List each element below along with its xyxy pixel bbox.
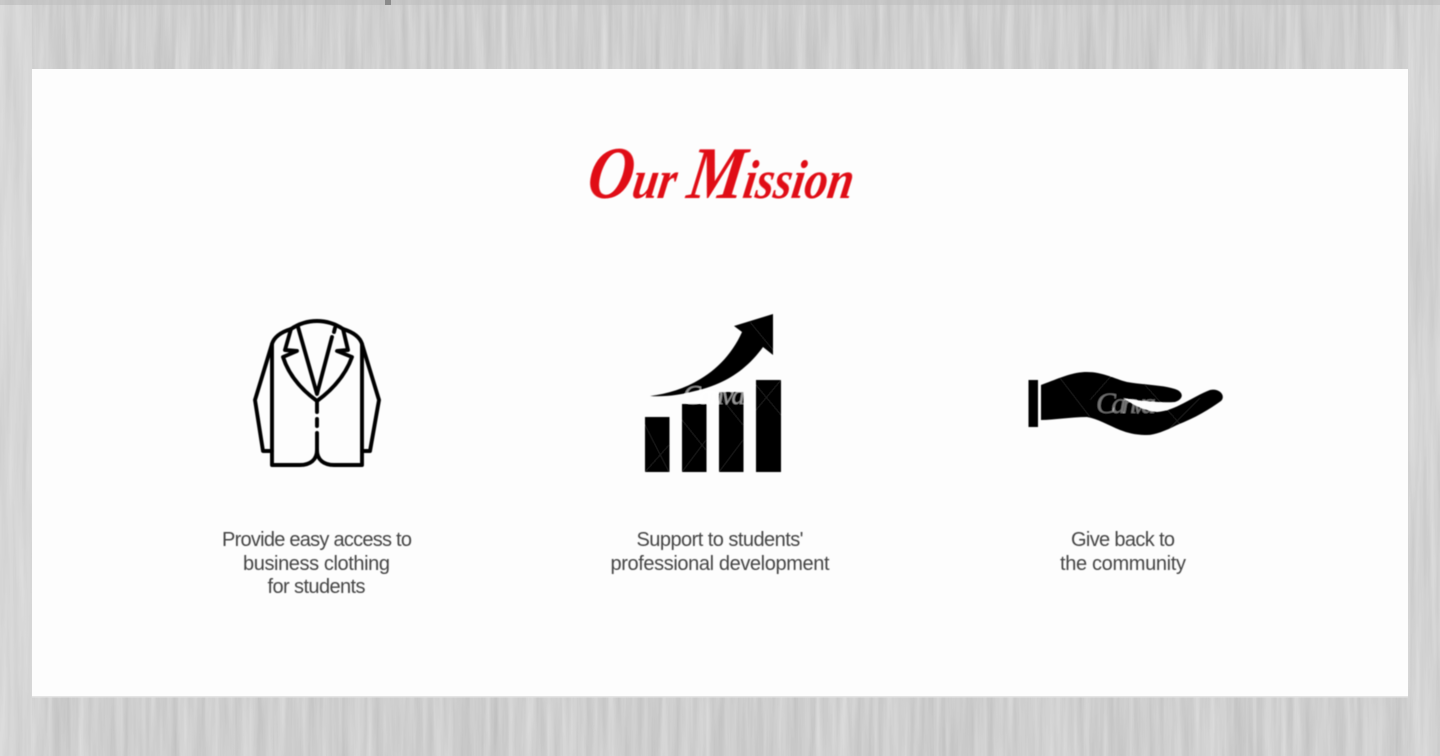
text block: professional development: professional development — [610, 553, 830, 575]
text block: community — [1060, 529, 1186, 575]
text block: clothing access: for students — [268, 576, 366, 598]
arrow — [650, 314, 773, 396]
panel: white mission card — [32, 69, 1408, 698]
text block: clothing access: business clothing — [243, 553, 390, 575]
watermark lines — [645, 322, 781, 472]
icon: blazer jacket — [255, 321, 379, 465]
text block: clothing access: Provide easy access to — [222, 529, 412, 551]
text block: professional development — [610, 529, 830, 575]
icon: open hand — [1028, 372, 1223, 435]
text block: community: the community — [1060, 553, 1186, 575]
icon: rising bar chart with arrow — [645, 314, 781, 472]
text block: professional development: Support to students' — [636, 529, 804, 551]
text block: community: Give back to — [1071, 529, 1175, 551]
title: Our Mission — [582, 133, 861, 215]
text block: clothing access — [222, 529, 412, 598]
watermark word: Canva — [1096, 387, 1156, 420]
watermark word: Canva — [683, 380, 745, 410]
bars — [645, 380, 781, 472]
